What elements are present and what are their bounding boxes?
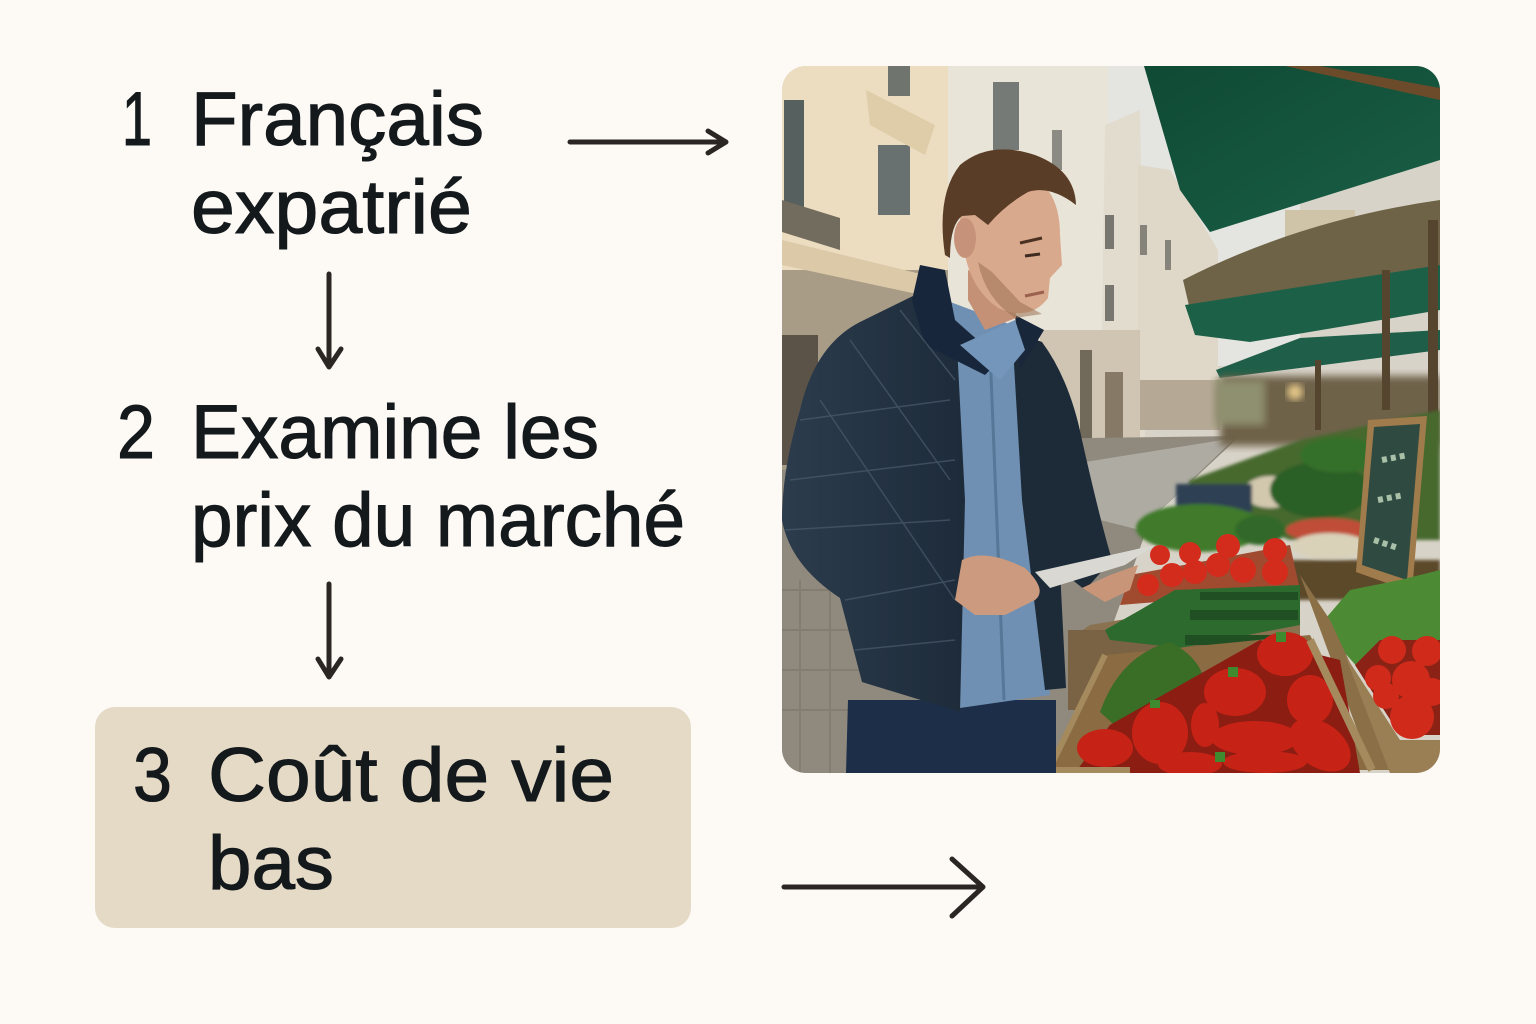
front crate of red peppers and broccoli: [1050, 632, 1375, 783]
green awnings: [1144, 66, 1440, 446]
photo: man reading prices at a market: [782, 66, 1446, 783]
tomatoes crate: [1120, 534, 1300, 605]
background produce stalls: [1136, 410, 1440, 600]
step 3 panel: Coût de vie bas: bas: [208, 821, 334, 906]
buildings: [782, 66, 1355, 470]
step 2: Examine les prix du marché: Examine les: [191, 390, 599, 475]
jacket: [782, 295, 965, 712]
arrow: step 1 to step 2: [318, 274, 341, 367]
step 2: Examine les prix du marché: prix du marché: [191, 478, 685, 563]
step 1: Français expatrié: [122, 77, 484, 250]
step 1: Français expatrié: Français: [191, 77, 484, 162]
face features: [978, 238, 1044, 318]
hands and paper: [1035, 545, 1155, 588]
step 3 panel: Coût de vie bas: [95, 707, 691, 928]
shirt: [945, 300, 1050, 708]
cucumbers crate: [1068, 585, 1300, 710]
arrow: step 3 to the right: [784, 859, 983, 916]
chalkboard sign: [1356, 416, 1427, 592]
step 3 panel: Coût de vie bas: 3: [133, 733, 172, 818]
arrow: step 2 to step 3: [318, 584, 341, 677]
neck: [968, 270, 1016, 330]
step 3 panel: Coût de vie bas: Coût de vie: [208, 733, 614, 818]
sky: [1100, 66, 1300, 366]
hair: [943, 149, 1076, 258]
step 2: Examine les prix du marché: 2: [117, 390, 155, 475]
street and pavement: [782, 436, 1240, 773]
man: [782, 149, 1155, 773]
step 2: Examine les prix du marché: [117, 390, 685, 563]
head: [960, 190, 1062, 313]
jeans: [846, 700, 1056, 773]
step 1: Français expatrié: 1: [122, 77, 152, 162]
right-hand crate of lettuce and tomatoes: [1300, 570, 1446, 773]
step 1: Français expatrié: expatrié: [191, 165, 472, 250]
arrow: step 1 to photo: [570, 131, 726, 153]
